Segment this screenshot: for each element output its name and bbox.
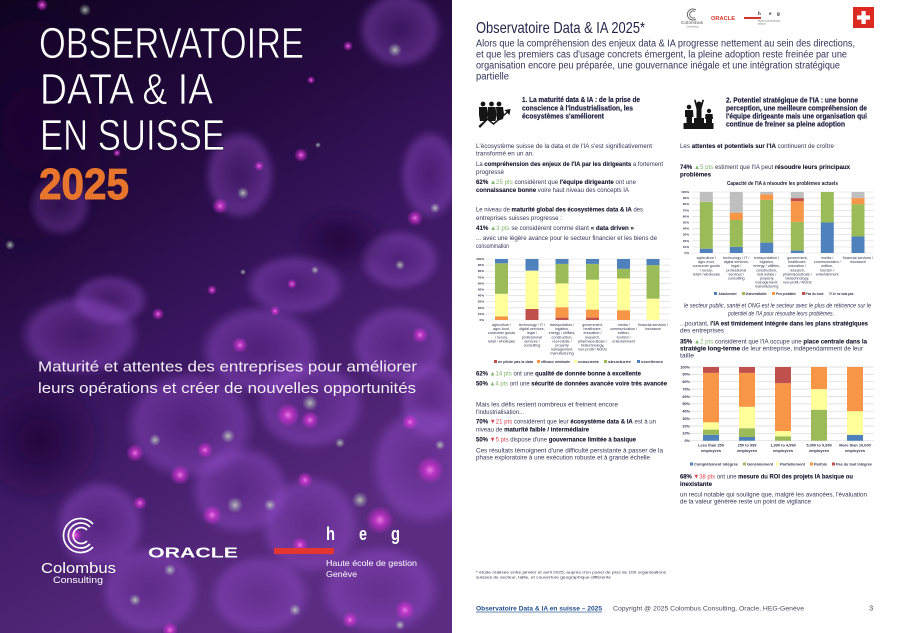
bar chart: data maturity by sector: logistics, bbox=[555, 327, 569, 331]
cover subtitle: Maturité et attentes des entreprises pour améliorer bbox=[38, 358, 417, 376]
cover title bbox=[39, 19, 304, 209]
text block: left column bottom: 50% ▲4 pts ont une sécurité de données avancée voire très avancée bbox=[476, 380, 667, 388]
logo: Colombus Consulting: Colombus bbox=[41, 560, 116, 577]
bar chart: AI integration by company size: 1,000 to 4,999 bbox=[770, 442, 796, 448]
text block: right column middle: le secteur public, santé et ONG est le secteur avec le plus de réticence sur le bbox=[684, 302, 871, 309]
footer: Observatoire Data & IA en suisse – 2025 bbox=[476, 606, 602, 613]
chart legend: capacity: Peu probable bbox=[776, 292, 796, 296]
text block: right column middle: 35% ▲2 pts considèrent que l'IA occupe une place centrale dans la bbox=[680, 338, 867, 345]
text block: left column bottom bbox=[476, 371, 667, 462]
heading: section 1: conscience à l'industrialisation, les bbox=[522, 106, 633, 112]
logo: HEG Genève: Genève bbox=[326, 569, 357, 579]
header logos: Consulting bbox=[686, 24, 699, 28]
bar chart: AI integration by company size: employees bbox=[845, 448, 865, 453]
text block: right column middle bbox=[680, 302, 871, 360]
heading: section 2 bbox=[726, 98, 867, 128]
bar chart: AI capacity to solve problems: consumer goods bbox=[693, 264, 720, 268]
chart legend: integration levels: Généralement bbox=[747, 462, 774, 466]
bar chart: AI capacity to solve problems: 90% bbox=[683, 196, 689, 200]
header logos: Haute école de gestion bbox=[758, 20, 781, 22]
text block: right column bottom: un recul notable qui souligne que, malgré les avancées, l'évaluation bbox=[680, 492, 867, 499]
bar chart: data maturity by sector: property bbox=[555, 344, 569, 348]
bar chart: AI capacity to solve problems: consulting bbox=[728, 276, 745, 280]
intro paragraph bbox=[476, 38, 855, 82]
bar chart: data maturity by sector: insurance bbox=[645, 327, 661, 331]
bar chart: AI integration by company size bbox=[680, 365, 874, 466]
bar chart: AI capacity to solve problems: / luxury, bbox=[700, 268, 713, 272]
header logos: ORACLE bbox=[711, 16, 736, 22]
bar chart: AI capacity to solve problems: retail / wholesale bbox=[693, 272, 720, 276]
bar chart: data maturity by sector: media / bbox=[618, 323, 631, 327]
intro paragraph: et que les premiers cas d'usage concrets émergent, la pleine adoption reste freinée par une bbox=[476, 50, 848, 60]
footer: Copyright @ 2025 Colombus Consulting, Oracle, HEG-Genève bbox=[613, 606, 804, 613]
bar chart: AI capacity to solve problems: property bbox=[760, 276, 774, 280]
bar chart: data maturity by sector: entertainment bbox=[612, 339, 635, 343]
bar chart: data maturity by sector: government, bbox=[582, 323, 603, 327]
header logos: g bbox=[777, 11, 780, 16]
chart legend: maturity levels: consciente bbox=[578, 360, 599, 364]
header logos: e bbox=[769, 11, 772, 16]
bar chart: AI capacity to solve problems: healthcare, bbox=[788, 260, 806, 264]
text block: right column middle: des entreprises bbox=[680, 328, 725, 335]
bar chart: data maturity by sector: consulting bbox=[524, 344, 540, 348]
bar chart: AI capacity to solve problems: transportation / bbox=[754, 256, 780, 260]
text block: left column top: Le niveau de maturité global des écosystèmes data & IA des bbox=[476, 206, 644, 214]
bar chart: AI integration by company size: 60% bbox=[682, 395, 691, 399]
bar chart: data maturity by sector: communication / bbox=[610, 327, 638, 331]
bar chart: data maturity by sector: construction, bbox=[552, 335, 572, 339]
text block: right column top: 74% ▲5 pts estiment que l'IA peut résoudre leurs principaux bbox=[680, 164, 850, 171]
header logos: h bbox=[758, 11, 761, 16]
chart legend: capacity: Vraisemblable bbox=[746, 292, 766, 296]
text block: left column bottom: niveau de maturité faible / intermédiaire bbox=[476, 427, 589, 434]
text block: left column top: progressé bbox=[476, 169, 504, 176]
bar chart: AI capacity to solve problems: communication / bbox=[814, 260, 842, 264]
chart legend: capacity: Absolument bbox=[718, 292, 737, 296]
icon: podium bbox=[684, 100, 714, 129]
chart legend: integration levels: Partiellement bbox=[780, 462, 806, 466]
bar chart: AI capacity to solve problems: entertainment bbox=[816, 272, 839, 276]
bar chart: AI capacity to solve problems: 10% bbox=[683, 245, 689, 249]
bar chart: AI integration by company size: employees bbox=[701, 448, 721, 453]
bar chart: AI capacity to solve problems: energy / utilities, bbox=[753, 264, 780, 268]
bar chart: AI capacity to solve problems: agro-food, bbox=[698, 260, 715, 264]
heading: section 2: perception, une meilleure compréhension de bbox=[726, 106, 867, 112]
text block: right column top: Les attentes et potentiels sur l'IA continuent de croître bbox=[680, 143, 834, 150]
bar chart: AI capacity to solve problems: digital services, bbox=[724, 260, 749, 264]
text block: left column bottom: Ces résultats témoignent d'une difficulté persistante à passer de la bbox=[476, 447, 663, 454]
bar chart: AI capacity to solve problems bbox=[681, 181, 874, 296]
cover title: DATA & IA bbox=[40, 65, 214, 114]
heading: section 2: l'équipe dirigeante mais une organisation qui bbox=[726, 114, 867, 120]
bar chart: data maturity by sector: edition, bbox=[618, 331, 630, 335]
cover subtitle bbox=[38, 358, 417, 397]
footnote: * étude réalisée entre janvier et avril 2025, auprès d'un panel de plus de 100 organisations bbox=[476, 569, 666, 574]
bar chart: data maturity by sector: 80% bbox=[478, 269, 484, 273]
bar chart: data maturity by sector: biotechnology, bbox=[581, 344, 604, 348]
bar chart: data maturity by sector: 20% bbox=[478, 306, 484, 310]
text block: left column top: L'écosystème suisse de la data et de l'IA s'est significativement bbox=[476, 143, 652, 150]
heading: section 1 bbox=[522, 97, 640, 120]
bar chart: AI capacity to solve problems: 50% bbox=[683, 220, 689, 224]
bar chart: AI capacity to solve problems: government, bbox=[787, 256, 808, 260]
intro paragraph: organisation encore peu préparée, une gouvernance inégale et une intégration stratégique bbox=[476, 60, 841, 72]
bar chart: AI integration by company size: More than 10,000 bbox=[839, 442, 871, 448]
text block: left column top: 41% ▲3 pts se considèrent comme étant « data driven » bbox=[476, 225, 634, 232]
chart legend: integration levels: Parfois bbox=[814, 462, 827, 466]
bar chart: data maturity by sector: education / bbox=[583, 331, 602, 335]
chart legend: integration levels: Complètement intégrée bbox=[694, 462, 738, 466]
chart legend: capacity bbox=[714, 292, 854, 296]
bar chart: data maturity by sector: 60% bbox=[478, 281, 484, 285]
chart legend: maturity levels: structurée bbox=[608, 360, 631, 364]
bar chart: AI integration by company size: 90% bbox=[682, 373, 691, 377]
icon: team with rising arrow bbox=[478, 102, 510, 128]
text block: left column bottom: 50% ▼5 pts dispose d'une gouvernance limitée à basique bbox=[476, 437, 636, 444]
bar chart: AI capacity to solve problems: agriculture / bbox=[697, 256, 717, 260]
bar chart: AI capacity to solve problems: 100% bbox=[681, 190, 689, 194]
text block: left column bottom: 70% ▼21 pts considèrent que leur écosystème data & IA est à un bbox=[476, 419, 656, 426]
logo: HEG Genève: Haute école de gestion bbox=[326, 558, 417, 568]
bar chart: AI integration by company size: employees bbox=[737, 448, 757, 453]
bar chart: AI capacity to solve problems: edition, bbox=[821, 264, 833, 268]
bar chart: data maturity by sector: 30% bbox=[478, 300, 484, 304]
chart title: Capacité de l'IA à résoudre les problèmes actuels bbox=[727, 181, 838, 187]
bar chart: data maturity by sector: technology / IT / bbox=[519, 323, 546, 327]
header logos: Genève bbox=[758, 24, 766, 26]
panel: cover bbox=[0, 0, 480, 633]
text block: left column top: ... avec une légère avance pour le secteur financier et les biens de bbox=[476, 235, 657, 242]
bar chart: AI integration by company size: 20% bbox=[682, 424, 691, 428]
bar chart: data maturity by sector: healthcare, bbox=[583, 327, 602, 331]
bar chart: data maturity by sector: / luxury, bbox=[495, 335, 508, 339]
page title: Observatoire Data & IA 2025* bbox=[476, 20, 645, 37]
bar chart: data maturity by sector: agro-food, bbox=[493, 327, 510, 331]
bar chart: data maturity by sector: 10% bbox=[478, 312, 484, 316]
bar chart: AI integration by company size: 70% bbox=[682, 387, 691, 391]
bar chart: data maturity by sector: 100% bbox=[476, 257, 484, 261]
bar chart: data maturity by sector: real estate / bbox=[552, 339, 573, 343]
bar chart: AI integration by company size: 0% bbox=[684, 439, 691, 443]
text block: right column middle: potentiel de l'IA pour résoudre leurs problèmes. bbox=[727, 311, 834, 318]
chart legend: integration levels bbox=[690, 462, 872, 466]
bar chart: AI integration by company size: 250 to 999 bbox=[738, 442, 757, 448]
icon: Swiss flag bbox=[853, 7, 874, 28]
bar chart: data maturity by sector: services / bbox=[524, 339, 541, 343]
cover title: EN SUISSE bbox=[40, 111, 225, 160]
bar chart: AI capacity to solve problems: biotechnology, bbox=[786, 276, 809, 280]
chart legend: capacity: Pas du tout bbox=[806, 292, 824, 296]
text block: left column top bbox=[476, 143, 663, 250]
bar chart: AI capacity to solve problems: technology / IT / bbox=[723, 256, 750, 260]
bar chart: AI capacity to solve problems: logistics, bbox=[760, 260, 774, 264]
chart legend: integration levels: Pas du tout intégrée bbox=[836, 462, 872, 466]
footer: 3 bbox=[869, 604, 873, 613]
bar chart: data maturity by sector bbox=[476, 257, 670, 364]
bar chart: AI capacity to solve problems: education / bbox=[788, 264, 807, 268]
bar chart: data maturity by sector: agriculture / bbox=[492, 323, 512, 327]
bar chart: AI integration by company size: 40% bbox=[682, 410, 691, 414]
bar chart: data maturity by sector: 50% bbox=[478, 288, 484, 292]
bar chart: AI capacity to solve problems: 40% bbox=[683, 227, 689, 231]
text block: right column middle: ...pourtant, l'IA est timidement intégrée dans les plans stratégiques bbox=[680, 320, 868, 327]
bar chart: AI integration by company size: employees bbox=[773, 448, 793, 453]
heading: section 2: 2. Potentiel stratégique de l'IA : une bonne bbox=[726, 98, 858, 104]
bar chart: AI capacity to solve problems: 30% bbox=[683, 233, 689, 237]
logo: HEG Genève: e bbox=[359, 524, 367, 544]
bar chart: data maturity by sector: management, bbox=[551, 348, 573, 352]
header logos bbox=[681, 9, 781, 28]
bar chart: data maturity by sector: research, bbox=[585, 335, 600, 339]
cover title: 2025 bbox=[39, 160, 129, 209]
heading: section 1: écosystèmes s'améliorent bbox=[522, 114, 605, 120]
footer bbox=[476, 604, 873, 613]
bar chart: AI integration by company size: 5,000 to 9,999 bbox=[806, 442, 832, 448]
bar chart: AI capacity to solve problems: financial services / bbox=[843, 256, 874, 260]
cover background image bbox=[0, 0, 480, 633]
heading: section 2: continue de freiner sa pleine adoption bbox=[726, 122, 845, 128]
text block: left column bottom: 62% ▲14 pts ont une qualité de donnée bonne à excellente bbox=[476, 371, 641, 378]
chart legend: maturity levels bbox=[494, 360, 663, 364]
text block: left column bottom: phase exploratoire à une exécution robuste et à grande échelle bbox=[476, 455, 650, 462]
bar chart: data maturity by sector: 40% bbox=[478, 294, 484, 298]
bar chart: AI integration by company size: 50% bbox=[682, 402, 691, 406]
bar chart: data maturity by sector: transportation / bbox=[550, 323, 575, 327]
bar chart: AI capacity to solve problems: research, bbox=[790, 268, 805, 272]
text block: left column top: La compréhension des enjeux de l'IA par les dirigeants a fortement bbox=[476, 161, 663, 168]
heading: section 1: 1. La maturité data & IA : de la prise de bbox=[522, 97, 640, 104]
bar chart: AI capacity to solve problems: services / bbox=[729, 272, 745, 276]
text block: left column top: transformé en un an. bbox=[476, 150, 534, 158]
text block: left column top: 62% ▲25 pts considèrent que l'équipe dirigeante ont une bbox=[476, 179, 636, 186]
bar chart: data maturity by sector: financial services / bbox=[638, 323, 669, 327]
bar chart: AI capacity to solve problems: 20% bbox=[683, 239, 689, 243]
text block: left column top: entreprises suisses progresse : bbox=[476, 215, 562, 222]
bar chart: AI integration by company size: 100% bbox=[680, 365, 691, 369]
text block: right column bottom bbox=[680, 474, 867, 506]
bar chart: AI capacity to solve problems: professional bbox=[726, 268, 746, 272]
bar chart: AI capacity to solve problems: legal / bbox=[731, 264, 742, 268]
text block: right column bottom: inexistante bbox=[680, 481, 712, 488]
bar chart: data maturity by sector: energy / utilities, bbox=[549, 331, 575, 335]
logo: HEG Genève bbox=[274, 524, 417, 579]
logo: HEG Genève: h bbox=[326, 524, 335, 544]
footnote bbox=[476, 569, 666, 580]
bar chart: AI capacity to solve problems: 80% bbox=[683, 202, 689, 206]
bar chart: AI capacity to solve problems: real estate / bbox=[757, 272, 777, 276]
bar chart: data maturity by sector: digital services, bbox=[519, 327, 545, 331]
bar chart: AI capacity to solve problems: pharmaceuticals / bbox=[783, 272, 813, 276]
bar chart: data maturity by sector: non-profit / NGOs bbox=[578, 348, 607, 352]
header logos: Colombus bbox=[681, 20, 704, 25]
text block: right column top bbox=[680, 143, 850, 178]
bar chart: data maturity by sector: manufacturing bbox=[550, 352, 574, 356]
intro paragraph: partielle bbox=[476, 72, 510, 82]
bar chart: data maturity by sector: consumer goods bbox=[488, 331, 515, 335]
text block: right column top: problèmes bbox=[680, 172, 711, 178]
text block: right column bottom: 68% ▼38 pts ont une mesure du ROI des projets IA basique ou bbox=[680, 474, 853, 481]
cover title: OBSERVATOIRE bbox=[39, 19, 304, 68]
chart legend: maturity levels: excellence bbox=[641, 360, 663, 364]
bar chart: AI integration by company size: Less than 250 bbox=[698, 442, 724, 448]
bar chart: data maturity by sector: 0% bbox=[480, 318, 484, 322]
bar chart: AI integration by company size: 80% bbox=[682, 380, 691, 384]
bar chart: data maturity by sector: retail / wholesale bbox=[488, 339, 515, 343]
chart legend: capacity: Je ne sais pas bbox=[832, 292, 854, 296]
intro paragraph: Alors que la compréhension des enjeux data & IA progresse nettement au sein des directions, bbox=[476, 38, 855, 50]
logo: Colombus Consulting: Consulting bbox=[53, 575, 103, 585]
bar chart: AI capacity to solve problems: tourism / bbox=[820, 268, 835, 272]
bar chart: AI capacity to solve problems: 60% bbox=[683, 214, 689, 218]
bar chart: AI integration by company size: 30% bbox=[682, 417, 691, 421]
text block: left column bottom: Mais les défis restent nombreux et freinent encore bbox=[476, 402, 618, 408]
text block: right column middle: taille bbox=[680, 353, 694, 360]
bar chart: AI integration by company size: 10% bbox=[682, 432, 691, 436]
bar chart: data maturity by sector: tourism / bbox=[617, 335, 632, 339]
cover subtitle: leurs opérations et créer de nouvelles opportunités bbox=[38, 380, 416, 397]
bar chart: data maturity by sector: 90% bbox=[478, 263, 484, 267]
bar chart: data maturity by sector: professional bbox=[522, 335, 542, 339]
bar chart: data maturity by sector: legal / bbox=[527, 331, 538, 335]
bar chart: AI capacity to solve problems: non-profit / NGOs bbox=[783, 281, 812, 285]
bar chart: AI capacity to solve problems: 70% bbox=[683, 208, 689, 212]
bar chart: AI capacity to solve problems: insurance bbox=[850, 260, 866, 264]
footnote: suisses de secteur, taille, et couverture géographique différente bbox=[476, 575, 612, 580]
chart legend: maturity levels: ne pilote pas la data bbox=[498, 360, 534, 364]
bar chart: AI capacity to solve problems: manufacturing bbox=[755, 285, 778, 289]
logo: Colombus Consulting bbox=[41, 518, 116, 585]
bar chart: AI capacity to solve problems: 0% bbox=[685, 251, 689, 255]
text block: left column top: consommation bbox=[476, 243, 509, 250]
logo: HEG Genève: g bbox=[391, 524, 400, 544]
text block: left column top: connaissance bonne voire haut niveau des concepts IA bbox=[476, 187, 630, 194]
bar chart: data maturity by sector: 70% bbox=[478, 275, 484, 279]
text block: right column bottom: de la valeur générée reste un point de vigilance bbox=[680, 499, 811, 506]
bar chart: AI capacity to solve problems: management, bbox=[755, 281, 778, 285]
bar chart: AI integration by company size: employees bbox=[809, 448, 829, 453]
logo: Oracle: ORACLE bbox=[148, 544, 238, 562]
bar chart: AI capacity to solve problems: construction, bbox=[756, 268, 777, 272]
text block: left column bottom: l'industrialisation... bbox=[476, 409, 524, 416]
bar chart: data maturity by sector: pharmaceuticals / bbox=[578, 339, 608, 343]
chart legend: maturity levels: efficace minimale bbox=[541, 360, 570, 364]
bar chart: AI capacity to solve problems: media / bbox=[821, 256, 834, 260]
text block: right column middle: stratégie long-terme de leur entreprise, indépendamment de leur bbox=[680, 346, 864, 353]
